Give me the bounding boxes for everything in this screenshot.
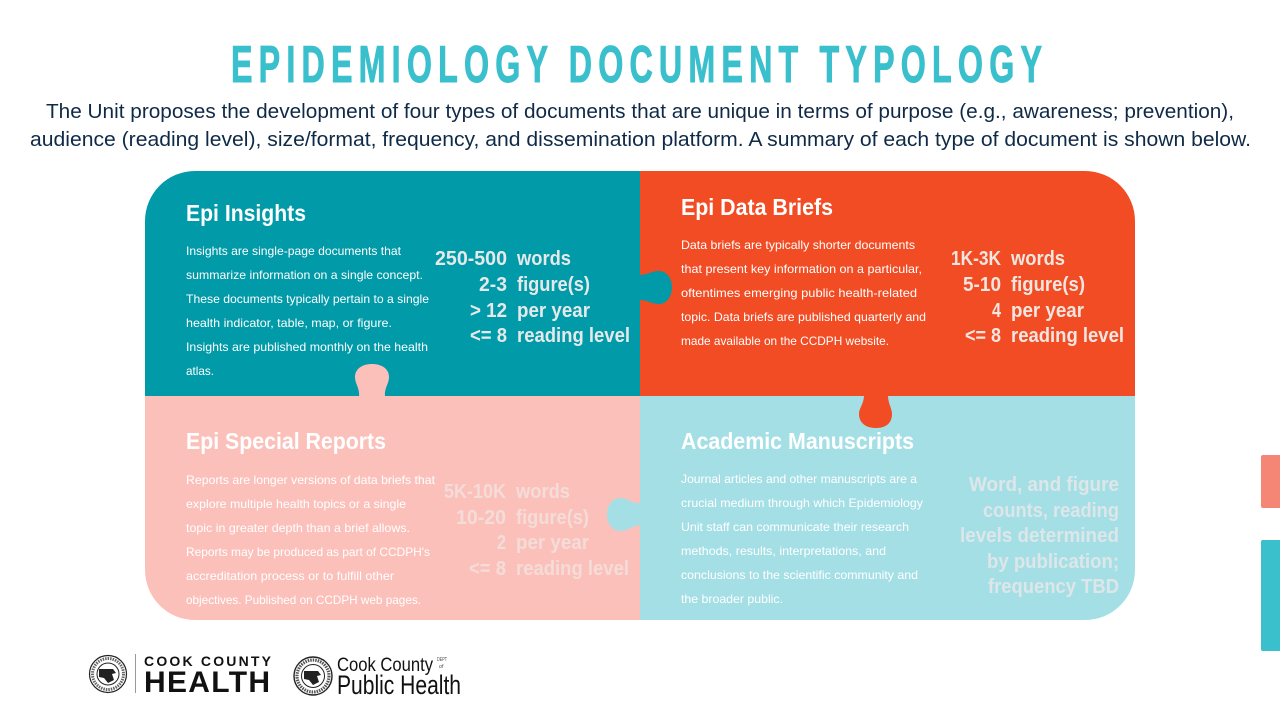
- stats note: Academic Manuscripts: by publication;: [987, 551, 1119, 573]
- stats: Epi Insights: > 12: [470, 300, 507, 322]
- stats: Epi Insights: reading level: [517, 325, 630, 347]
- text: Epi Special Reports description: Reports are longer versions of data briefs that: [186, 473, 436, 487]
- stats note: Academic Manuscripts: counts, reading: [983, 500, 1119, 522]
- text: Epi Data Briefs description: Data briefs are typically shorter documents: [681, 238, 915, 252]
- side tab: teal: [1261, 540, 1280, 651]
- panel: Epi Data Briefs: [640, 171, 1135, 396]
- stats note: Academic Manuscripts: [960, 474, 1119, 598]
- stats note: Academic Manuscripts: levels determined: [960, 525, 1119, 547]
- stats: Epi Data Briefs: reading level: [1011, 325, 1124, 347]
- text: Epi Data Briefs description: oftentimes emerging public health-related: [681, 286, 917, 300]
- stats: Epi Insights: 250-500: [435, 248, 507, 270]
- stats: Epi Data Briefs: words: [1010, 248, 1065, 270]
- panel: Academic Manuscripts: [607, 271, 1135, 620]
- stats: Epi Data Briefs: 5-10: [963, 274, 1001, 296]
- stats: Epi Data Briefs: [951, 248, 1124, 347]
- text: Academic Manuscripts description: Unit staff can communicate their research: [681, 520, 909, 534]
- logo: Cook County Health: COOK COUNTY: [144, 653, 272, 669]
- text: Epi Insights description: Insights are published monthly on the health: [186, 340, 428, 354]
- stats: Epi Special Reports: <= 8: [469, 558, 506, 580]
- stats: Epi Special Reports: figure(s): [516, 507, 589, 529]
- stats: Epi Special Reports: per year: [516, 532, 589, 554]
- stats: Epi Insights: figure(s): [517, 274, 590, 296]
- text: Academic Manuscripts description: conclusions to the scientific community and: [681, 568, 918, 582]
- text: Epi Insights description: summarize information on a single concept.: [186, 268, 423, 282]
- stats: Epi Data Briefs: figure(s): [1011, 274, 1085, 296]
- title: Epi Special Reports: Epi Special Reports: [186, 428, 386, 454]
- logo: Cook County Department of Public Health: Cook County: [337, 654, 433, 676]
- text: Academic Manuscripts description: methods, results, interpretations, and: [681, 544, 886, 558]
- logo: Cook County Department of Public Health: DEPT: [437, 657, 447, 663]
- logo: Cook County Department of Public Health: of: [439, 664, 444, 670]
- text: Academic Manuscripts description: Journal articles and other manuscripts are a: [681, 472, 917, 486]
- stats: Epi Data Briefs: 1K-3K: [951, 248, 1001, 270]
- stats: Epi Insights: per year: [517, 300, 590, 322]
- text: Epi Special Reports description: accreditation process or to fulfill other: [186, 569, 394, 583]
- text: Epi Insights description: Insights are single-page documents that: [186, 244, 402, 258]
- panel: Epi Special Reports: [145, 364, 640, 620]
- stats: Epi Special Reports: reading level: [516, 558, 629, 580]
- text: Academic Manuscripts description: the broader public.: [681, 592, 783, 606]
- stats: Epi Special Reports: 2: [497, 532, 506, 554]
- stats: Epi Insights: <= 8: [470, 325, 507, 347]
- title: Epi Insights: Epi Insights: [186, 200, 306, 226]
- connector: light blue tab: [607, 498, 641, 531]
- panel: Epi Insights: [145, 171, 640, 396]
- text: Epi Special Reports description: Reports may be produced as part of CCDPH's: [186, 545, 430, 559]
- text: Epi Insights description: atlas.: [186, 364, 214, 378]
- stats note: Academic Manuscripts: frequency TBD: [988, 576, 1119, 598]
- text: Epi Insights description: These documents typically pertain to a single: [186, 292, 429, 306]
- stats note: Academic Manuscripts: Word, and figure: [969, 474, 1119, 496]
- subtitle text: The Unit proposes the development of four types of documents that are unique in terms of purpose (e.g., awareness; prevention),: [46, 100, 1234, 123]
- stats: Epi Special Reports: [444, 481, 629, 580]
- side tab: coral: [1261, 455, 1280, 508]
- text: Epi Special Reports description: [186, 473, 436, 607]
- stats: Epi Special Reports: 5K-10K: [444, 481, 506, 503]
- icon: county seal: [90, 656, 126, 692]
- stats: Epi Data Briefs: 4: [992, 300, 1002, 322]
- text: Epi Special Reports description: topic in greater depth than a brief allows.: [186, 521, 410, 535]
- logo: Cook County Health: HEALTH: [144, 666, 270, 699]
- stats: Epi Special Reports: 10-20: [456, 507, 506, 529]
- stats: Epi Insights: 2-3: [479, 274, 507, 296]
- stats: Epi Data Briefs: <= 8: [965, 325, 1001, 347]
- stats: Epi Data Briefs: per year: [1011, 300, 1084, 322]
- title: Academic Manuscripts: Academic Manuscripts: [681, 428, 914, 454]
- connector: pink tab: [355, 364, 389, 397]
- text: Academic Manuscripts description: crucial medium through which Epidemiology: [681, 496, 923, 510]
- stats: Epi Special Reports: words: [515, 481, 570, 503]
- title: EPIDEMIOLOGY DOCUMENT TYPOLOGY: [231, 36, 1042, 94]
- text: Epi Insights description: health indicator, table, map, or figure.: [186, 316, 392, 330]
- text: Epi Data Briefs description: that present key information on a particular,: [681, 262, 922, 276]
- connector: teal tab: [639, 271, 672, 304]
- connector: orange tab: [859, 395, 892, 428]
- subtitle text: audience (reading level), size/format, frequency, and dissemination platform. A summary of each type of document is shown below.: [30, 128, 1251, 151]
- title: Epi Data Briefs: Epi Data Briefs: [681, 194, 833, 220]
- text: Epi Data Briefs description: topic. Data briefs are published quarterly and: [681, 310, 926, 324]
- puzzle graphic: [145, 171, 1135, 620]
- logo: Cook County Department of Public Health: Public Health: [337, 670, 461, 700]
- stats: Epi Insights: [435, 248, 630, 347]
- text: Epi Data Briefs description: made available on the CCDPH website.: [681, 334, 889, 348]
- subtitle text: [30, 100, 1251, 151]
- icon: county seal: [294, 657, 332, 695]
- text: Epi Special Reports description: objectives. Published on CCDPH web pages.: [186, 593, 421, 607]
- text: Epi Insights description: [186, 244, 429, 378]
- logo: Cook County Health: [90, 653, 272, 699]
- stats: Epi Insights: words: [516, 248, 571, 270]
- text: Epi Data Briefs description: [681, 238, 926, 348]
- text: Epi Special Reports description: explore multiple health topics or a single: [186, 497, 406, 511]
- text: Academic Manuscripts description: [681, 472, 923, 606]
- logo: Cook County Department of Public Health: [294, 654, 461, 700]
